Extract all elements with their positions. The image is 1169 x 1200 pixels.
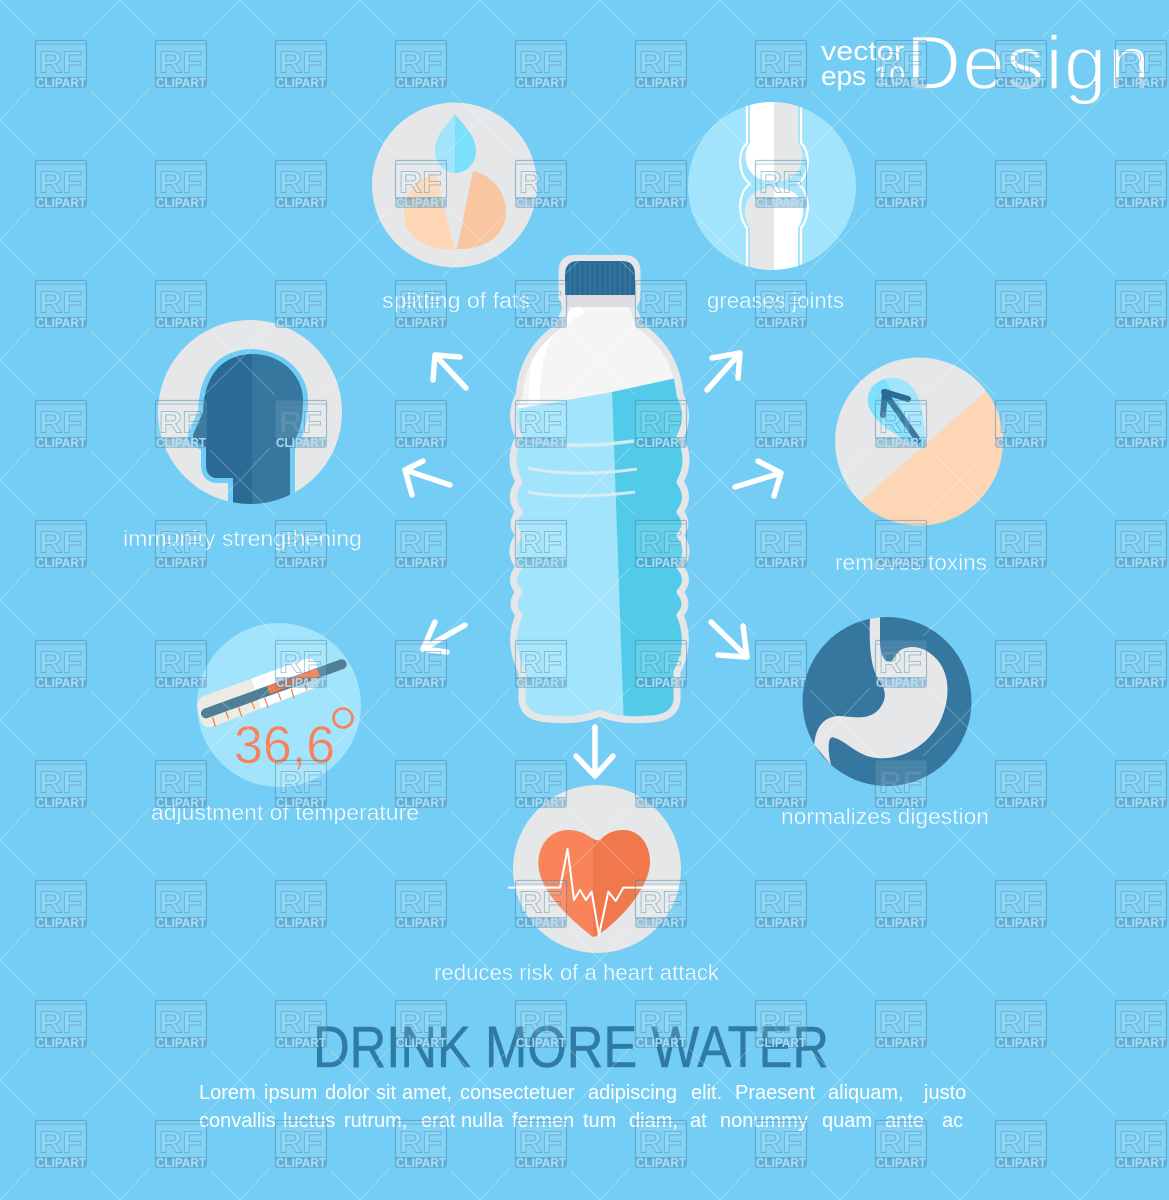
title: drink more water: DRINK MORE WATER (313, 1015, 829, 1080)
body text: adipiscing (588, 1082, 677, 1104)
arrow: down right (711, 622, 747, 657)
body text: ipsum (264, 1082, 317, 1104)
badge: vector eps 10 (821, 36, 905, 91)
body text: amet, (402, 1082, 452, 1104)
arrow: down (576, 727, 613, 776)
body text: convallis (199, 1110, 276, 1132)
body text: aliquam, (828, 1082, 904, 1104)
body text: ac (942, 1110, 963, 1132)
arrows (405, 353, 781, 776)
label: immunity strengthening: immunity strengthening (123, 526, 362, 551)
badge: vector eps 10: eps 10 (821, 61, 905, 91)
icon: normalizes digestion stomach (802, 617, 972, 786)
icon: adjustment of temperature thermometer: 36,6 (234, 716, 335, 775)
body text: nonummy (720, 1110, 808, 1132)
body text: ante (885, 1110, 924, 1132)
water bottle (505, 258, 690, 730)
body text: tum (583, 1110, 616, 1132)
arrow: up right (707, 353, 740, 390)
icon: removes toxins (835, 358, 1003, 526)
body text: sit (376, 1082, 396, 1104)
body text: luctus (283, 1110, 335, 1132)
icon: reduces risk of heart attack (508, 785, 681, 953)
icon: immunity head (158, 320, 342, 510)
heading: Design: Design (906, 21, 1150, 106)
body text: at (690, 1110, 707, 1132)
arrow: down left (423, 622, 465, 652)
icon: greases joints (688, 100, 856, 272)
body text: justo (923, 1082, 966, 1104)
body text: quam (822, 1110, 872, 1132)
arrow: left (405, 461, 450, 495)
body text: Lorem (199, 1082, 256, 1104)
label: greases joints: greases joints (707, 288, 844, 313)
body text: rutrum, (344, 1110, 407, 1132)
icon: splitting of fats (372, 102, 537, 268)
icon: adjustment of temperature thermometer (197, 623, 361, 787)
arrow: up left (433, 355, 466, 388)
label: normalizes digestion: normalizes digestion (781, 804, 989, 829)
label: reduces risk of a heart attack: reduces risk of a heart attack (434, 960, 720, 985)
body text: consectetuer (460, 1082, 575, 1104)
body text: elit. (691, 1082, 722, 1104)
label: adjustment of temperature: adjustment of temperature (151, 800, 419, 825)
badge: vector eps 10: vector (821, 36, 904, 66)
labels (123, 288, 989, 985)
body text: erat (421, 1110, 456, 1132)
body text (199, 1082, 966, 1132)
body text: dolor (325, 1082, 370, 1104)
arrow: right (735, 461, 781, 496)
body text: diam, (629, 1110, 678, 1132)
label: removes toxins: removes toxins (835, 550, 987, 575)
label: splitting of fats: splitting of fats (382, 288, 530, 313)
body text: Praesent (735, 1082, 815, 1104)
body text: fermen (512, 1110, 574, 1132)
body text: nulla (461, 1110, 504, 1132)
